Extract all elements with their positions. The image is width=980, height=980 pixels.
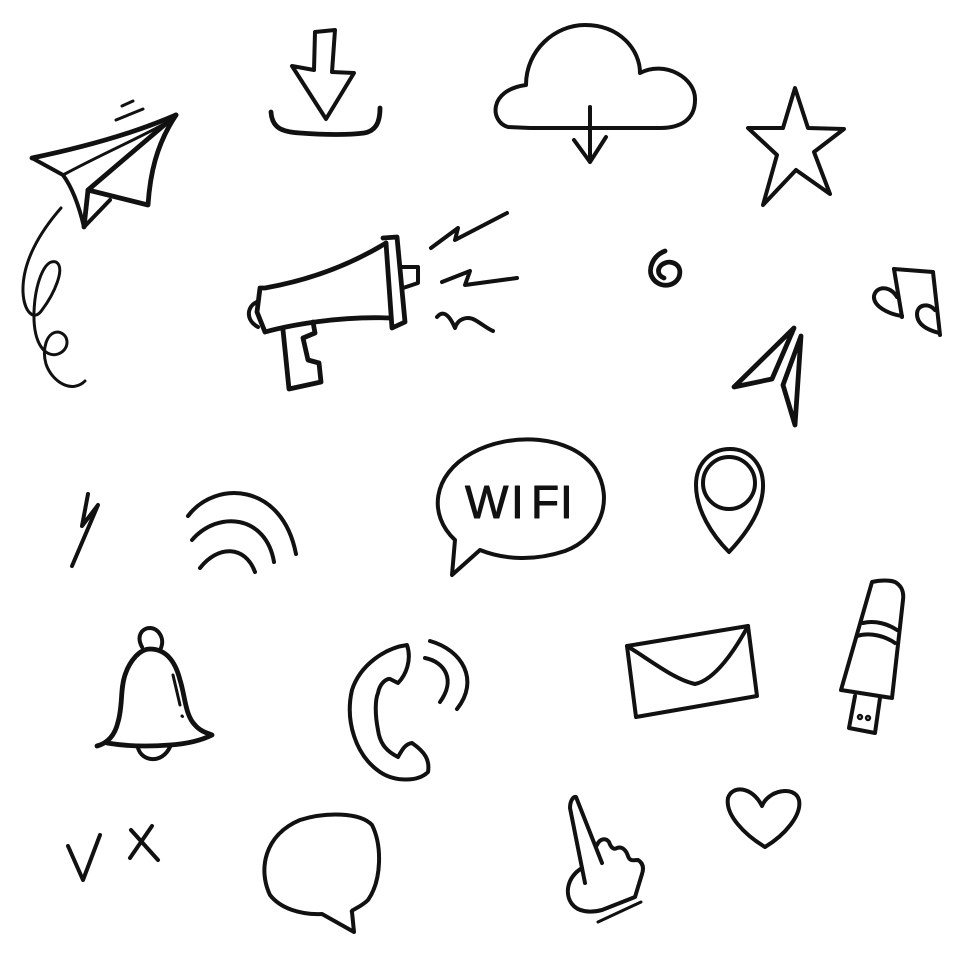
icon: envelope <box>627 626 757 717</box>
icon: star <box>748 88 844 205</box>
icon: check mark <box>68 835 100 880</box>
icon: paper plane <box>32 101 176 227</box>
icon: heart <box>728 789 799 847</box>
icon: download arrow <box>271 30 380 134</box>
callout: wifi speech bubble <box>438 439 604 575</box>
icon: wifi waves <box>188 493 296 572</box>
icon: pointing hand <box>568 797 643 922</box>
icon: location pin <box>696 449 763 552</box>
icon: small paper plane <box>734 328 801 425</box>
icon: spiral <box>651 251 680 285</box>
icon: looping swirl trail <box>23 208 85 386</box>
icon: music notes <box>874 269 940 335</box>
icon: cross mark <box>130 826 158 860</box>
icon: cloud download <box>496 25 695 162</box>
icon: lightning bolt <box>72 494 98 566</box>
icon: telephone handset <box>350 641 467 780</box>
icon: empty speech bubble <box>264 815 379 932</box>
icon: megaphone <box>249 237 418 389</box>
icon: megaphone sound bolts <box>431 213 517 331</box>
icon: notification bell <box>97 628 212 759</box>
text: WIFI: WIFI <box>465 476 573 528</box>
icon: usb stick <box>841 580 903 733</box>
